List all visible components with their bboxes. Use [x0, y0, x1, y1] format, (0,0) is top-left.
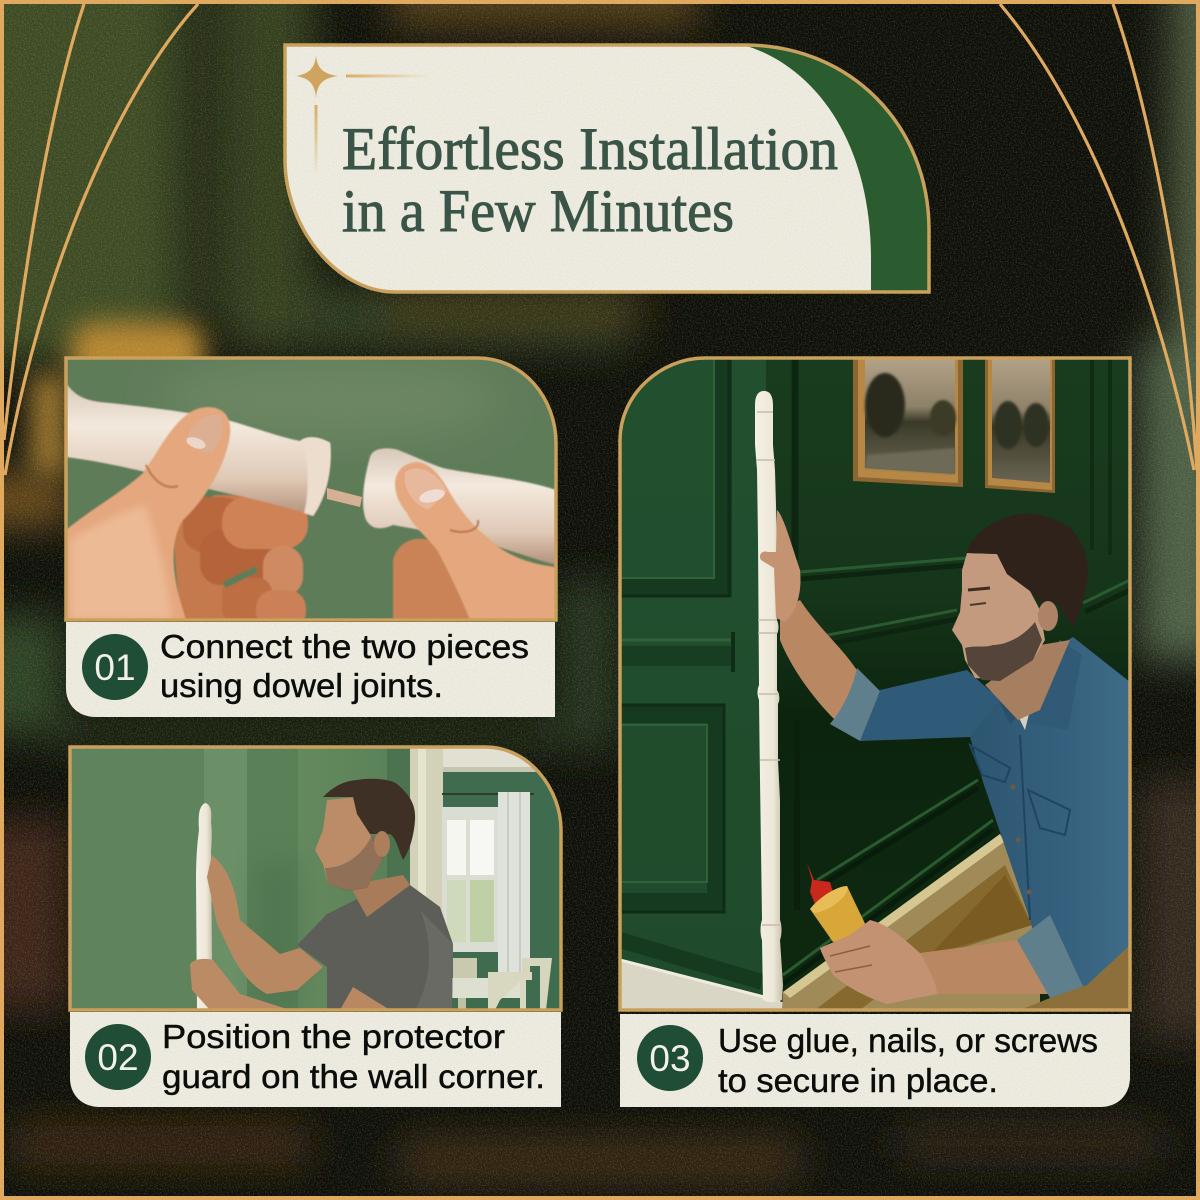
dowel right: [363, 448, 556, 565]
eye and brow: [968, 588, 990, 590]
peg: [327, 488, 362, 507]
finger group left: [172, 495, 308, 630]
lower hand: [190, 959, 290, 1010]
step 3 text: [718, 1022, 1098, 1099]
neck: [350, 875, 410, 917]
icon: sparkle with fading rays: [296, 55, 430, 177]
left wall mouldings: [620, 358, 762, 982]
baseboard: [622, 962, 782, 1008]
room beyond: [443, 772, 560, 1008]
glue bottle: [807, 863, 870, 942]
guard: [196, 803, 212, 1010]
dowel left: [66, 383, 330, 516]
lower forearm: [920, 940, 1050, 994]
thumb right: [395, 462, 556, 620]
panel: step 1: [66, 358, 556, 717]
picture frames: [853, 358, 1055, 493]
neck: [985, 640, 1070, 720]
step 3 text: Use glue, nails, or screws: [718, 1022, 1098, 1059]
thumb left: [66, 407, 230, 620]
floor and skirting: [782, 834, 1040, 1010]
gripping hand: [820, 920, 937, 1004]
cream title surface: [285, 45, 871, 292]
guard: [755, 391, 783, 1002]
thumb nail right: [405, 469, 447, 510]
step 1 text: using dowel joints.: [160, 667, 443, 704]
badge 03: [637, 1025, 703, 1091]
cuff upper: [830, 668, 880, 741]
door frame: [410, 748, 443, 912]
thumb nail left: [186, 415, 223, 452]
right wall mouldings: [783, 358, 1130, 984]
badge 01: 01: [94, 647, 136, 688]
step 2 caption: [70, 1012, 561, 1107]
title text: Effortless Installation: [342, 116, 838, 182]
step 2 text: [162, 1018, 545, 1095]
tan foreground: [1020, 945, 1130, 1010]
hair: [323, 779, 415, 860]
face: [952, 553, 1045, 680]
panel: step 2: [70, 747, 563, 1107]
shirt details: [1020, 640, 1082, 730]
stubble: [325, 835, 385, 891]
curtain: [498, 792, 530, 975]
photo: man positioning guard on wall corner: [70, 747, 563, 1010]
step 3 caption: [620, 1014, 1130, 1107]
title card: [285, 45, 929, 292]
beard: [965, 622, 1042, 681]
step 1 text: [160, 628, 529, 704]
shirt: [297, 885, 453, 1010]
panel: step 3: [620, 358, 1130, 1107]
curtain rod: [442, 793, 534, 795]
title text: [342, 116, 838, 244]
badge 02: 02: [97, 1037, 139, 1078]
step 3 text: to secure in place.: [718, 1062, 998, 1099]
photo: hands joining two dowel pieces: [66, 358, 556, 630]
torso: [970, 637, 1130, 995]
hair: [967, 514, 1088, 628]
step 1 caption: [66, 622, 555, 717]
photo: man securing guard to green paneled wall: [620, 358, 1130, 1010]
badge 02: [85, 1024, 151, 1090]
table and chairs: [453, 958, 477, 978]
step 2 text: guard on the wall corner.: [162, 1058, 545, 1095]
window: [442, 807, 498, 952]
head: [315, 797, 382, 890]
raised arm and hand: [780, 600, 860, 720]
step 2 text: Position the protector: [162, 1018, 505, 1055]
right hand fingers: [393, 539, 478, 620]
badge 01: [82, 634, 148, 700]
back arm: [207, 855, 323, 994]
badge 03: 03: [649, 1038, 691, 1079]
title text: in a Few Minutes: [342, 178, 734, 244]
step 1 text: Connect the two pieces: [160, 628, 529, 665]
upper sleeve: [860, 670, 1000, 741]
